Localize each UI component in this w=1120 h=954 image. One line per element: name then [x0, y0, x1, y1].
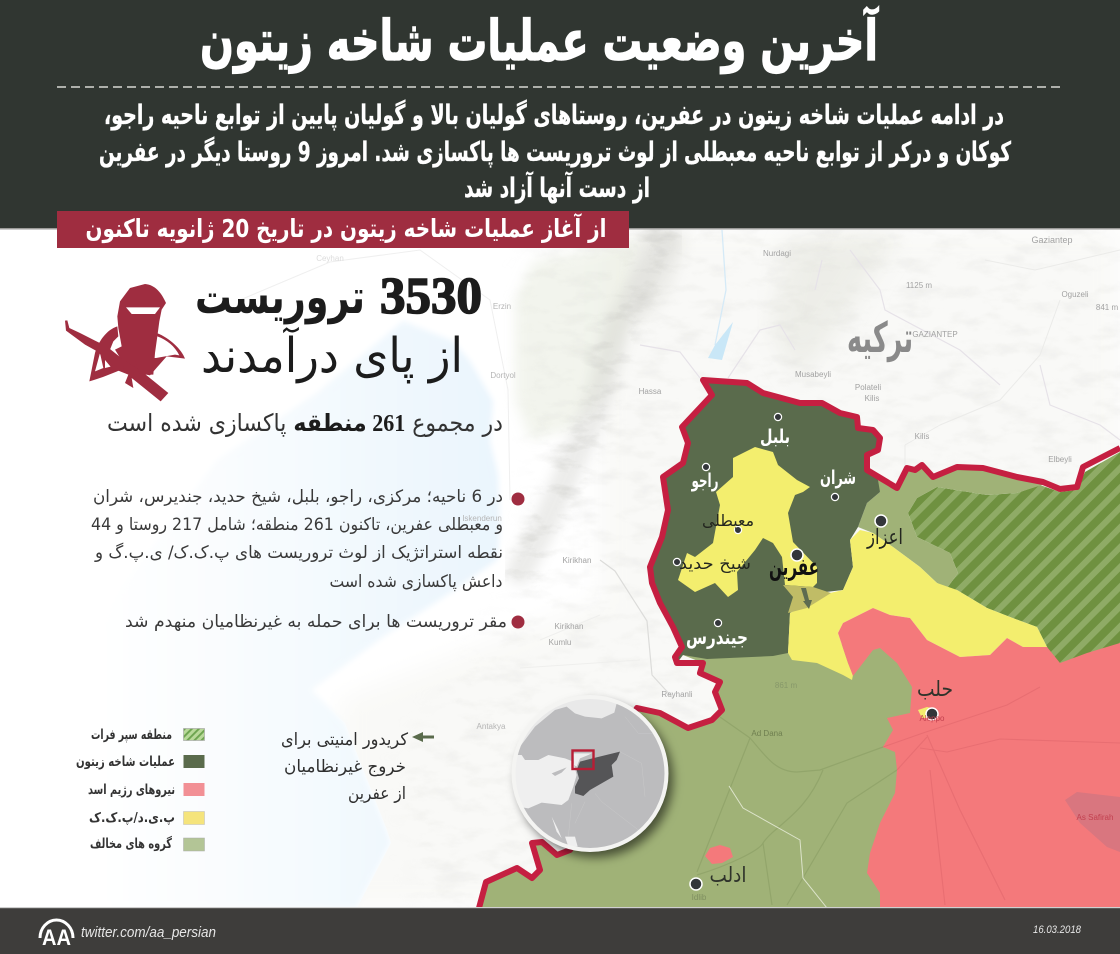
faint labels inside zones — [692, 681, 1113, 902]
As Safirah patch — [1065, 792, 1120, 852]
base map labels: GAZIANTEP — [912, 330, 958, 339]
Idlib regime pocket — [705, 845, 733, 864]
roads on opposition area — [697, 717, 897, 905]
base map labels: Elbeyli — [1048, 455, 1072, 464]
icon: corridor arrow on map — [801, 588, 812, 609]
legend — [76, 727, 204, 852]
base map labels: Polateli — [855, 383, 881, 392]
base map labels: Ceyhan — [316, 254, 344, 263]
faint labels inside zones: Idlib — [692, 893, 707, 902]
date banner: از آغاز عملیات شاخه زیتون در تاریخ 20 ژانویه تاکنون — [86, 213, 606, 244]
red border line — [479, 380, 1120, 908]
label: Turkey: ترکیه — [847, 313, 913, 363]
regime forces area — [838, 608, 1120, 908]
white trace line — [729, 786, 827, 908]
base map labels — [316, 235, 1118, 731]
bullet list — [91, 487, 525, 632]
civilian corridor zone — [783, 585, 831, 613]
bullet text 1: نقطه استراتژیک از لوث تروریست های پ.ک.ک/ ی.پ.گ و — [94, 542, 503, 563]
Aleppo YPG pocket — [918, 707, 930, 718]
base map labels: Kirikhan — [555, 622, 583, 631]
sub-heading: 261 areas: در مجموع 261 منطقه پاکسازی شده است — [107, 409, 503, 437]
opposition-held area — [479, 640, 930, 908]
faint labels inside zones: Ad Dana — [751, 729, 783, 738]
base map labels: Kumlu — [549, 638, 571, 647]
Afrin operation zone — [650, 380, 880, 663]
label: Jindires: جیندرس — [686, 625, 748, 649]
map background — [242, 230, 1120, 907]
land texture — [340, 228, 1120, 908]
icon: corridor arrow — [412, 732, 434, 742]
base map labels: Dortyol — [490, 371, 516, 380]
corridor text: از عفرین — [348, 784, 406, 804]
bullet text 1: داعش پاکسازی شده است — [330, 572, 502, 592]
label: Sharan: شران — [820, 467, 856, 489]
label: Azaz: اعزاز — [866, 525, 903, 549]
base map labels: Reyhanli — [661, 690, 693, 699]
legend: opposition: گروه های مخالف — [90, 835, 172, 852]
base map labels: Kilis — [865, 394, 879, 403]
YPG/PKK area east — [788, 530, 1047, 680]
inset locator map — [508, 690, 670, 860]
YPG/PKK pocket centre — [678, 447, 817, 597]
bullet text 1: و معبطلی عفرین، تاکنون 261 منطقه؛ شامل 217 روستا و 44 — [91, 515, 503, 535]
base map labels: Musabeyli — [795, 370, 831, 379]
date: 16.03.2018 — [1033, 924, 1082, 936]
faint west land lines — [240, 250, 510, 500]
intro paragraph — [99, 99, 1011, 204]
corridor text — [281, 730, 409, 804]
faint labels inside zones: 861 m — [775, 681, 797, 690]
base map labels: Antakya — [477, 722, 506, 731]
legend: Euphrates Shield: منطقه سپر فرات — [91, 727, 172, 743]
legend: Olive Branch: عملیات شاخه زیتون — [76, 754, 175, 770]
base map labels: Oguzeli — [1061, 290, 1089, 299]
base map labels: Gaziantep — [1031, 235, 1073, 245]
date banner — [57, 211, 629, 248]
roads on regime area — [883, 687, 1120, 905]
base map labels: Kilis — [915, 432, 929, 441]
corridor text: کریدور امنیتی برای — [281, 730, 409, 750]
icon: AA logo: AA — [42, 925, 71, 950]
base map labels: 1125 m — [906, 281, 932, 290]
base map labels: Nurdagi — [763, 249, 791, 258]
map labels — [679, 313, 1113, 902]
base map labels: 841 m — [1096, 303, 1118, 312]
bullet dot 2 — [512, 616, 524, 628]
bullet dot 1 — [512, 492, 524, 506]
rivers and borders on base map — [520, 230, 1120, 698]
corridor text: خروج غیرنظامیان — [284, 757, 406, 777]
headline: 3530 terrorists: 3530 — [380, 268, 482, 325]
headline: neutralized: از پای درآمدند — [201, 326, 463, 384]
town dots — [673, 413, 839, 627]
faint labels inside zones: As Safirah — [1077, 813, 1113, 822]
legend: regime: نیروهای رژیم اسد — [88, 782, 175, 798]
label: Raju: راجو — [691, 470, 718, 492]
bullet text 1: در 6 ناحیه؛ مرکزی، راجو، بلبل، شیخ حدید، جندیرس، شران — [93, 487, 503, 507]
label: Sheikh Hadid: شیخ حدید — [679, 554, 751, 574]
Euphrates Shield zone — [908, 452, 1120, 668]
label: Afrin: عفرین — [769, 553, 819, 581]
icon: militant with rifle — [65, 284, 185, 401]
city markers — [690, 515, 938, 890]
faint labels inside zones: Aleppo — [920, 714, 945, 723]
corridor note — [281, 730, 434, 804]
intro paragraph: از دست آنها آزاد شد — [464, 171, 650, 204]
label: Aleppo: حلب — [917, 677, 953, 701]
base map labels: Iskenderun — [462, 514, 502, 523]
footer bar — [0, 907, 1120, 954]
headline: 3530 terrorists: تروریست — [195, 270, 365, 325]
Azaz opposition area — [858, 467, 1045, 588]
inset red frame — [572, 750, 594, 769]
bullet text 1 — [91, 487, 503, 592]
header panel — [0, 0, 1120, 230]
sea — [268, 322, 500, 907]
base map labels: Hassa — [639, 387, 662, 396]
label: Mabatli: معبطلی — [702, 511, 754, 530]
base map labels: Kirikhan — [563, 556, 591, 565]
twitter handle: twitter.com/aa_persian — [81, 925, 216, 941]
label: Idlib: ادلب — [710, 863, 746, 887]
base map labels: Erzin — [493, 302, 511, 311]
bullet text 2: مقر تروریست ها برای حمله به غیرنظامیان منهدم شد — [125, 612, 507, 632]
legend: PYD/PKK: پ.ی.د/پ.ک.ک — [89, 810, 175, 826]
label: Bulbul: بلبل — [760, 426, 790, 448]
